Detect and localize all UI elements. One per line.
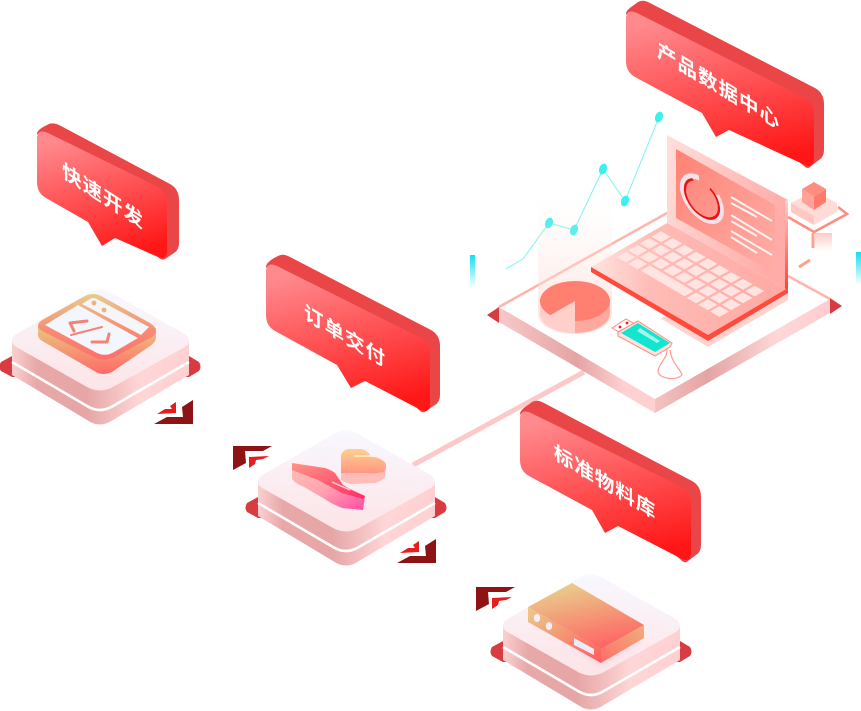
code window title bar [82,298,149,335]
code window shadow [50,315,150,372]
pie chart in glass cylinder [538,197,612,334]
code window depth [38,326,156,374]
code symbol [70,321,109,342]
panel: product data centre platform [487,213,842,413]
connector line [413,372,584,465]
icon: chevrons bottom right, panel 2 [397,539,436,563]
usb body [618,321,672,356]
box top [528,583,644,649]
laptop shadow [660,285,788,347]
icon: code window [38,294,156,374]
laptop base [591,223,788,337]
callout: product data centre: 产品数据中心 [657,39,780,135]
heart [341,449,386,473]
panel: order delivery platform [246,430,446,566]
donut chart on screen [682,168,721,229]
icon: server box [528,583,644,665]
icon: usb drive [612,319,682,379]
hand side [292,463,365,510]
platform red corners [487,298,842,323]
cyan light bars [470,252,861,288]
screen text lines [731,197,772,255]
usb connector [612,319,635,333]
panel: standard materials platform [490,574,692,710]
code window content [45,305,138,355]
icon: chevrons top left, panel 2 [233,446,272,470]
box front [528,607,601,663]
platform right side [655,299,830,413]
callout: quick development: 快速开发 [62,159,144,234]
platform top [499,213,830,399]
laptop red edge [591,267,788,341]
callout: product data centre [626,1,824,168]
callout: standard materials library: 标准物料库 [554,441,656,524]
panel: quick development platform [0,290,200,424]
line chart [506,110,664,269]
heart side [341,465,386,484]
usb strap [658,349,682,379]
laptop lid [667,135,788,290]
icon: small table with cube [788,182,847,267]
box right side [601,625,644,663]
icon: laptop [591,135,788,347]
icon: chevrons top left, panel 3 [476,587,515,611]
callout: standard materials library [520,401,701,562]
keyboard [616,231,764,317]
callout: order delivery: 订单交付 [304,300,386,372]
code window frame [38,294,156,360]
hand top [292,463,365,499]
laptop lid edge [785,199,788,292]
callout: quick development [37,123,179,260]
platform left side [499,307,655,413]
callout: order delivery [266,255,440,412]
laptop screen [676,149,775,273]
icon: hand holding heart [292,449,386,510]
icon: chevrons bottom right, panel 1 [154,400,193,424]
